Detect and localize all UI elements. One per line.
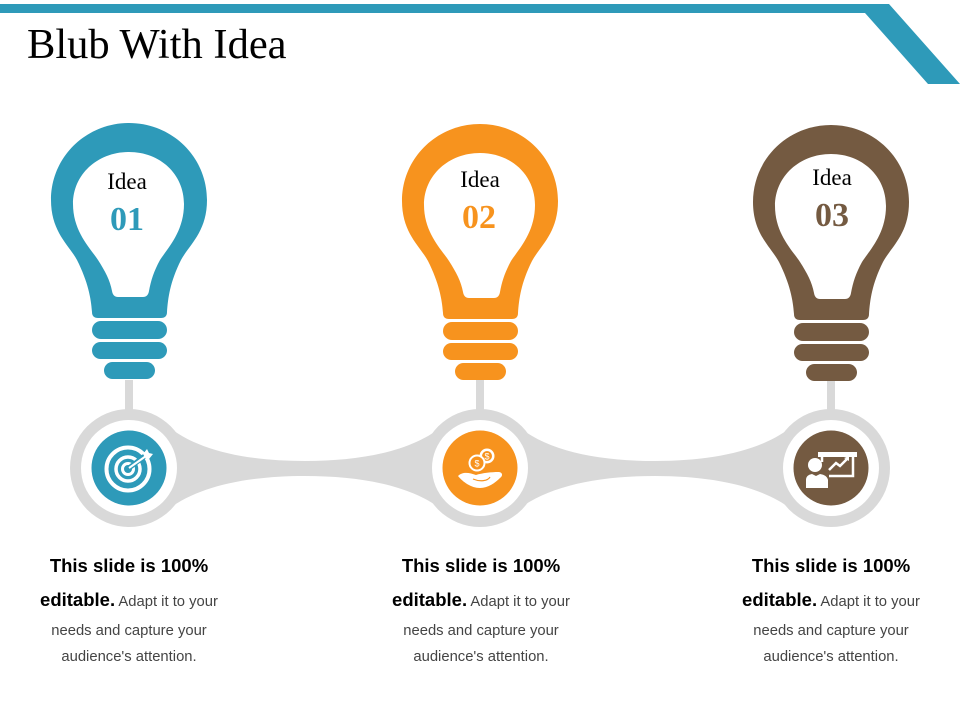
text block 2: editable. Adapt it to your bbox=[392, 589, 570, 610]
title: Blub With Idea bbox=[27, 21, 287, 68]
text block 3: This slide is 100% bbox=[752, 555, 910, 576]
icon: hand with coins: $ bbox=[484, 452, 490, 462]
text block 3 bbox=[742, 555, 920, 665]
text block 1: audience's attention. bbox=[61, 649, 197, 665]
bulb 3 bbox=[753, 125, 909, 381]
text block 2 bbox=[392, 555, 570, 665]
text block 1: needs and capture your bbox=[51, 623, 207, 639]
text block 1: editable. Adapt it to your bbox=[40, 589, 218, 610]
text block 3: audience's attention. bbox=[763, 649, 899, 665]
icon: hand with coins bbox=[442, 430, 518, 506]
bulb 1 label: Idea bbox=[107, 169, 147, 194]
bulb 2 bbox=[402, 124, 558, 380]
bulb 3 label: Idea bbox=[812, 165, 852, 190]
bulb 1 label: 01 bbox=[110, 201, 144, 238]
bulb 2 label: Idea bbox=[460, 167, 500, 192]
bulb 3 label: 03 bbox=[815, 197, 849, 234]
text block 3: editable. Adapt it to your bbox=[742, 589, 920, 610]
top banner ribbon bbox=[0, 4, 960, 84]
bulb 1 label bbox=[107, 169, 147, 238]
bulb 2 label: 02 bbox=[462, 199, 496, 236]
text block 3: needs and capture your bbox=[753, 623, 909, 639]
bulb 3 label bbox=[812, 165, 852, 234]
text block 2: needs and capture your bbox=[403, 623, 559, 639]
bulb 2 label bbox=[460, 167, 500, 236]
icon: target bbox=[92, 430, 166, 506]
connector timeline bbox=[70, 380, 890, 527]
text block 1 bbox=[40, 555, 218, 665]
icon: presenter with chart bbox=[794, 430, 868, 506]
text block 2: audience's attention. bbox=[413, 649, 549, 665]
text block 1: This slide is 100% bbox=[50, 555, 208, 576]
bulb 1 bbox=[51, 123, 207, 379]
text block 2: This slide is 100% bbox=[402, 555, 560, 576]
icon: hand with coins: $ bbox=[474, 458, 480, 468]
